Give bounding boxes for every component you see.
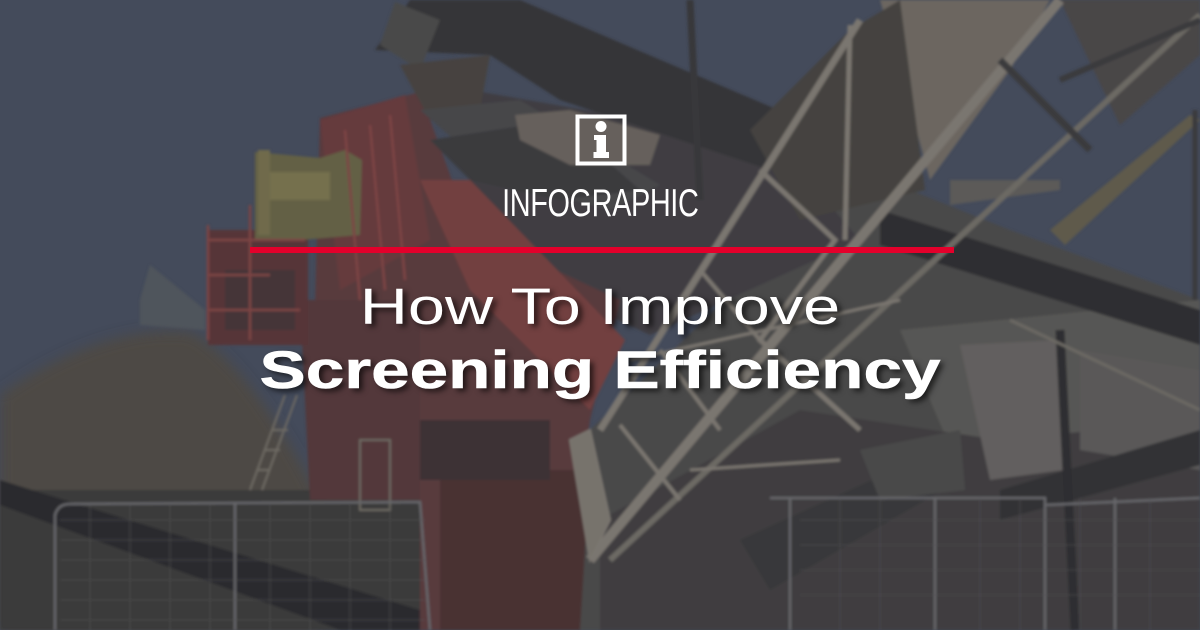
chain link fences: [55, 498, 1200, 630]
left lower belt: [0, 480, 420, 630]
gravel mound: [0, 331, 320, 630]
main upper conveyor: [375, 0, 790, 170]
truss lattice: [570, 0, 1200, 630]
lower centre/right mass of machinery: [570, 170, 1200, 630]
red platform rails: [208, 115, 405, 340]
lower conveyor right: [1000, 430, 1200, 520]
dark mid right conveyor: [880, 210, 1200, 345]
dark machinery behind icon: [470, 90, 860, 335]
yellow unit: [255, 150, 362, 240]
title: [260, 278, 945, 405]
tan panel behind icon: [515, 110, 660, 165]
distant structure: [140, 265, 205, 330]
icon: information box: [576, 114, 626, 166]
tan concrete lower right: [960, 340, 1065, 480]
left platform: [208, 230, 308, 345]
label: INFOGRAPHIC: INFOGRAPHIC: [502, 182, 698, 225]
title line 1: How To Improve: [360, 278, 840, 335]
title line 2: Screening Efficiency: [260, 341, 940, 400]
material stream: [420, 100, 660, 210]
divider: red rule: [250, 247, 954, 253]
red machine body: [310, 92, 620, 630]
stairs: [250, 395, 390, 510]
big tan hopper top-right: [880, 0, 1050, 180]
